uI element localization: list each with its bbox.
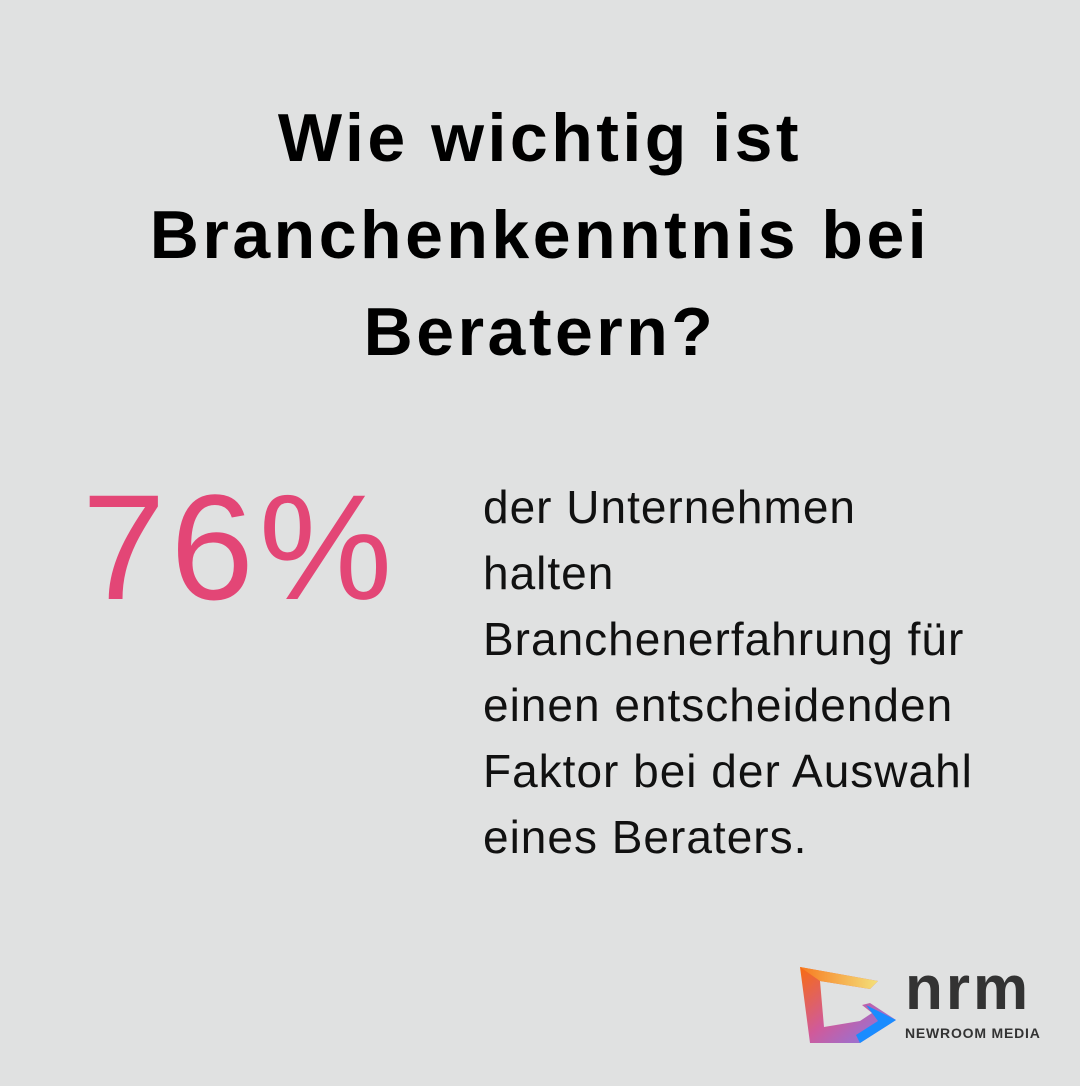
icon: logo mark	[800, 967, 896, 1043]
big stat: 76%	[82, 463, 397, 631]
description: einen entscheidenden	[483, 679, 953, 731]
description: der Unternehmen	[483, 481, 856, 533]
description	[483, 481, 973, 863]
description: Branchenerfahrung für	[483, 613, 964, 665]
title: Beratern?	[364, 294, 716, 370]
description: halten	[483, 547, 614, 599]
title: Wie wichtig ist	[278, 100, 802, 176]
logo: NEWROOM MEDIA	[905, 1025, 1041, 1041]
logo	[800, 954, 1041, 1043]
description: Faktor bei der Auswahl	[483, 745, 973, 797]
title	[150, 100, 930, 370]
title: Branchenkenntnis bei	[150, 197, 930, 273]
description: eines Beraters.	[483, 811, 807, 863]
logo text: nrm	[905, 954, 1031, 1023]
